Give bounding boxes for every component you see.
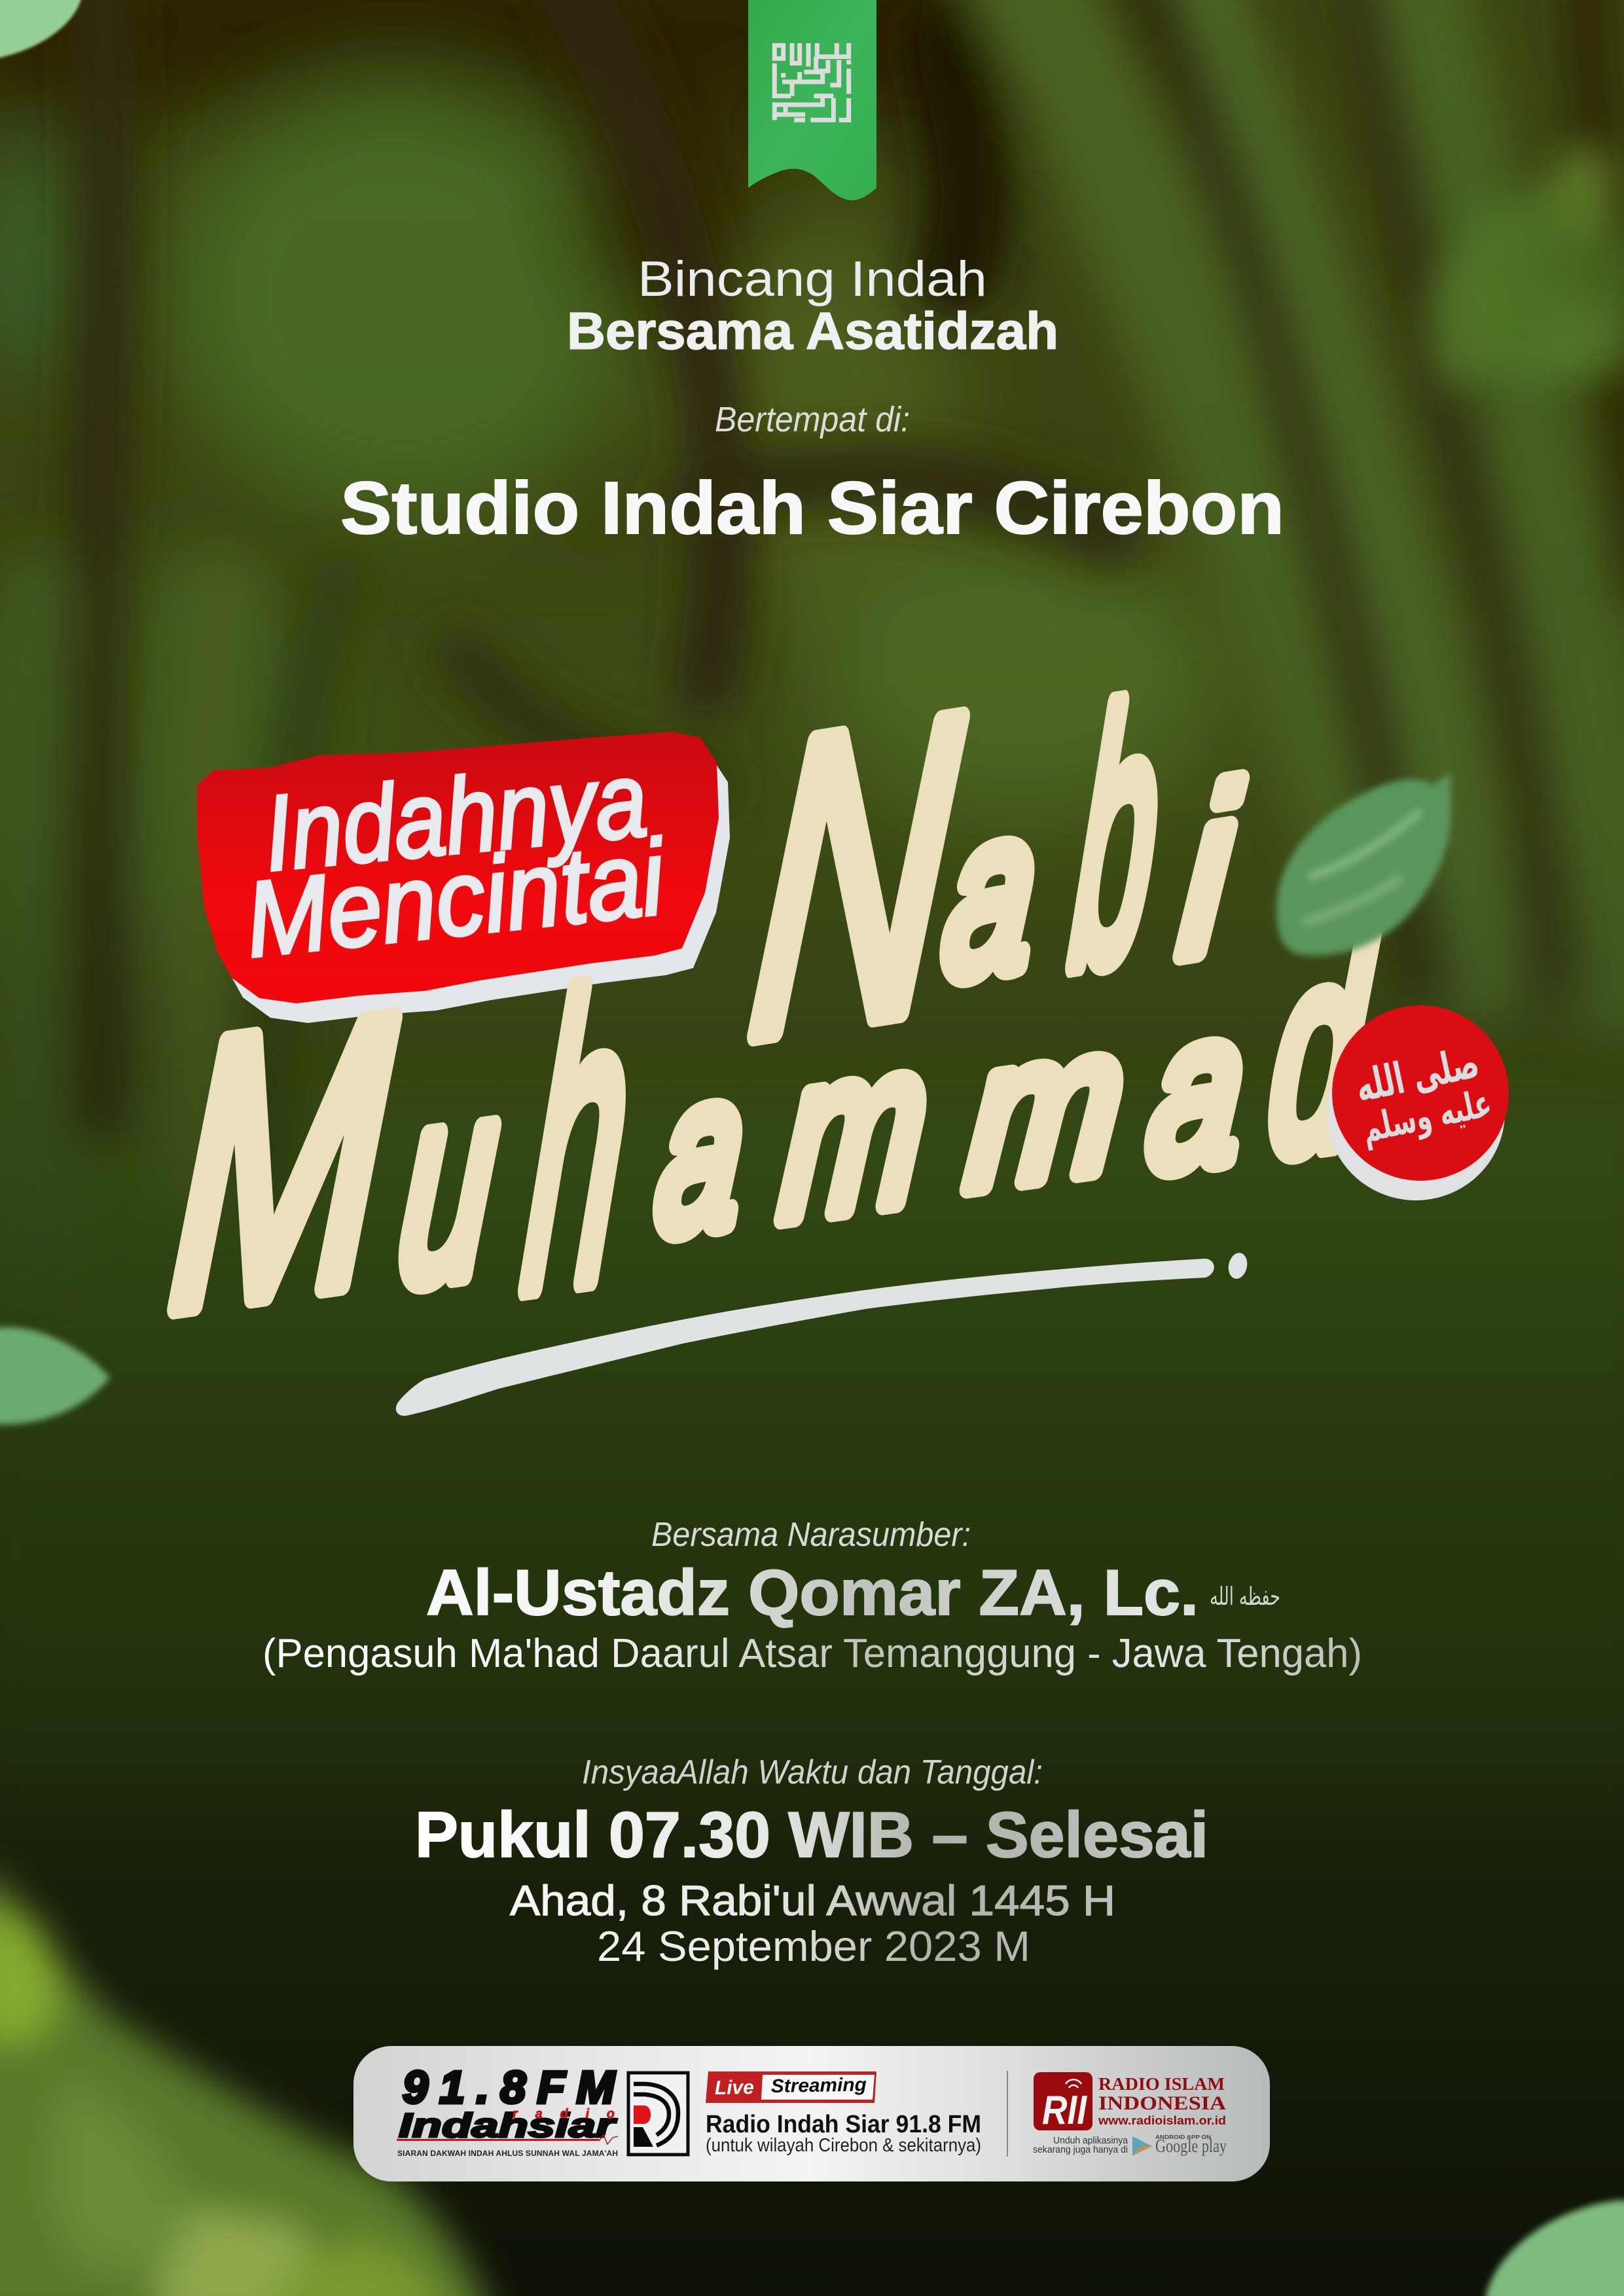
red label: Indahnya Mencintai <box>197 732 730 1023</box>
speaker name: Al-Ustadz Qomar ZA, Lc. <box>426 1556 1199 1628</box>
title: Muhammad: u <box>391 1024 507 1343</box>
text: download prompt <box>1033 2135 1128 2155</box>
leaf: top-left corner <box>0 0 82 59</box>
logo: Radio Islam Indonesia: INDONESIA <box>1098 2092 1226 2114</box>
text: time intro: InsyaaAllah Waktu dan Tanggal: <box>582 1753 1043 1791</box>
title: Muhammad: a <box>651 1026 751 1281</box>
text: Bertempat di: Bertempat di: <box>715 400 910 439</box>
title: Muhammad: m <box>962 982 1132 1232</box>
blurred foreground foliage bottom-left <box>0 1878 497 2296</box>
heading: Bersama Asatidzah: Bersama Asatidzah <box>567 302 1058 360</box>
text: download prompt: Unduh aplikasinya <box>1053 2135 1128 2146</box>
logo: Radio Islam Indonesia: RADIO ISLAM <box>1098 2074 1225 2094</box>
badge: Live Streaming: Live <box>715 2077 754 2099</box>
icon: square kufic basmala <box>774 43 849 120</box>
logo: 91.8FM Indahsiar: 91.8FM <box>403 2062 616 2113</box>
logo: Radio Islam Indonesia: www.radioislam.or.id <box>1098 2114 1226 2127</box>
logo: 91.8FM Indahsiar: SIARAN DAKWAH INDAH AHLUS SUNNAH WAL JAMA'AH <box>397 2149 618 2158</box>
logo: 91.8FM Indahsiar: Indahsiar <box>399 2107 617 2145</box>
icon: Google Play: ANDROID APP ON <box>1155 2134 1211 2140</box>
heading: Bincang Indah: Bincang Indah <box>638 251 987 307</box>
text: download prompt: sekarang juga hanya di <box>1033 2144 1128 2155</box>
title: Nabi: i <box>1174 738 1246 1005</box>
title: Muhammad: h <box>513 907 645 1376</box>
Gregorian date: 24 September 2023 M <box>597 1922 1030 1970</box>
title: Muhammad: m <box>775 992 936 1268</box>
logo: 91.8FM Indahsiar: radio <box>513 2107 615 2121</box>
icon: Google Play <box>1132 2134 1227 2157</box>
title: Nabi <box>738 628 1246 1126</box>
badge: red circle with Arabic honorific <box>1327 1005 1509 1200</box>
leaf: left edge <box>0 1327 110 1424</box>
title: Muhammad: M <box>161 935 403 1390</box>
text: radio name: Radio Indah Siar 91.8 FM <box>706 2111 981 2138</box>
badge: red circle with Arabic honorific: صلى الله <box>1351 1037 1483 1112</box>
footer banner <box>353 2046 1270 2181</box>
logo: R radio waves <box>628 2073 688 2155</box>
brush underline <box>396 1251 1250 1416</box>
title: Muhammad: a <box>1142 963 1252 1217</box>
red label: Indahnya Mencintai: Mencintai <box>240 817 672 980</box>
title: Nabi: N <box>738 628 973 1126</box>
title: Muhammad: d <box>1261 883 1382 1214</box>
badge: red circle with Arabic honorific: عليه وسلم <box>1358 1081 1496 1152</box>
title: Nabi: a <box>937 758 1045 1028</box>
title: Muhammad <box>161 883 1382 1390</box>
logo: 91.8FM Indahsiar <box>397 2062 618 2158</box>
leaf: falling near title <box>1276 772 1451 956</box>
leaf: bottom-right corner <box>1486 2200 1624 2296</box>
icon: ribbon bookmark <box>748 0 876 200</box>
text: Bersama Narasumber: Bersama Narasumber: <box>651 1516 971 1554</box>
honorific Arabic: حفظه الله <box>1210 1582 1280 1611</box>
Hijri date: Ahad, 8 Rabi'ul Awwal 1445 H <box>510 1876 1115 1924</box>
heading: venue: Studio Indah Siar Cirebon <box>340 467 1284 549</box>
text: coverage area: (untuk wilayah Cirebon & sekitarnya) <box>706 2135 981 2156</box>
logo: Radio Islam Indonesia: RII <box>1042 2088 1088 2133</box>
logo: Radio Islam Indonesia <box>1034 2072 1226 2133</box>
badge: Live Streaming: Streaming <box>771 2074 867 2097</box>
speaker role: (Pengasuh Ma'had Daarul Atsar Temanggung - Jawa Tengah) <box>262 1631 1362 1676</box>
red label: Indahnya Mencintai: Indahnya <box>259 739 652 893</box>
icon: Google Play: Google play <box>1155 2136 1227 2157</box>
title: Nabi: b <box>1062 632 1172 1041</box>
badge: Live Streaming <box>706 2072 876 2103</box>
event time: Pukul 07.30 WIB – Selesai <box>415 1799 1208 1871</box>
